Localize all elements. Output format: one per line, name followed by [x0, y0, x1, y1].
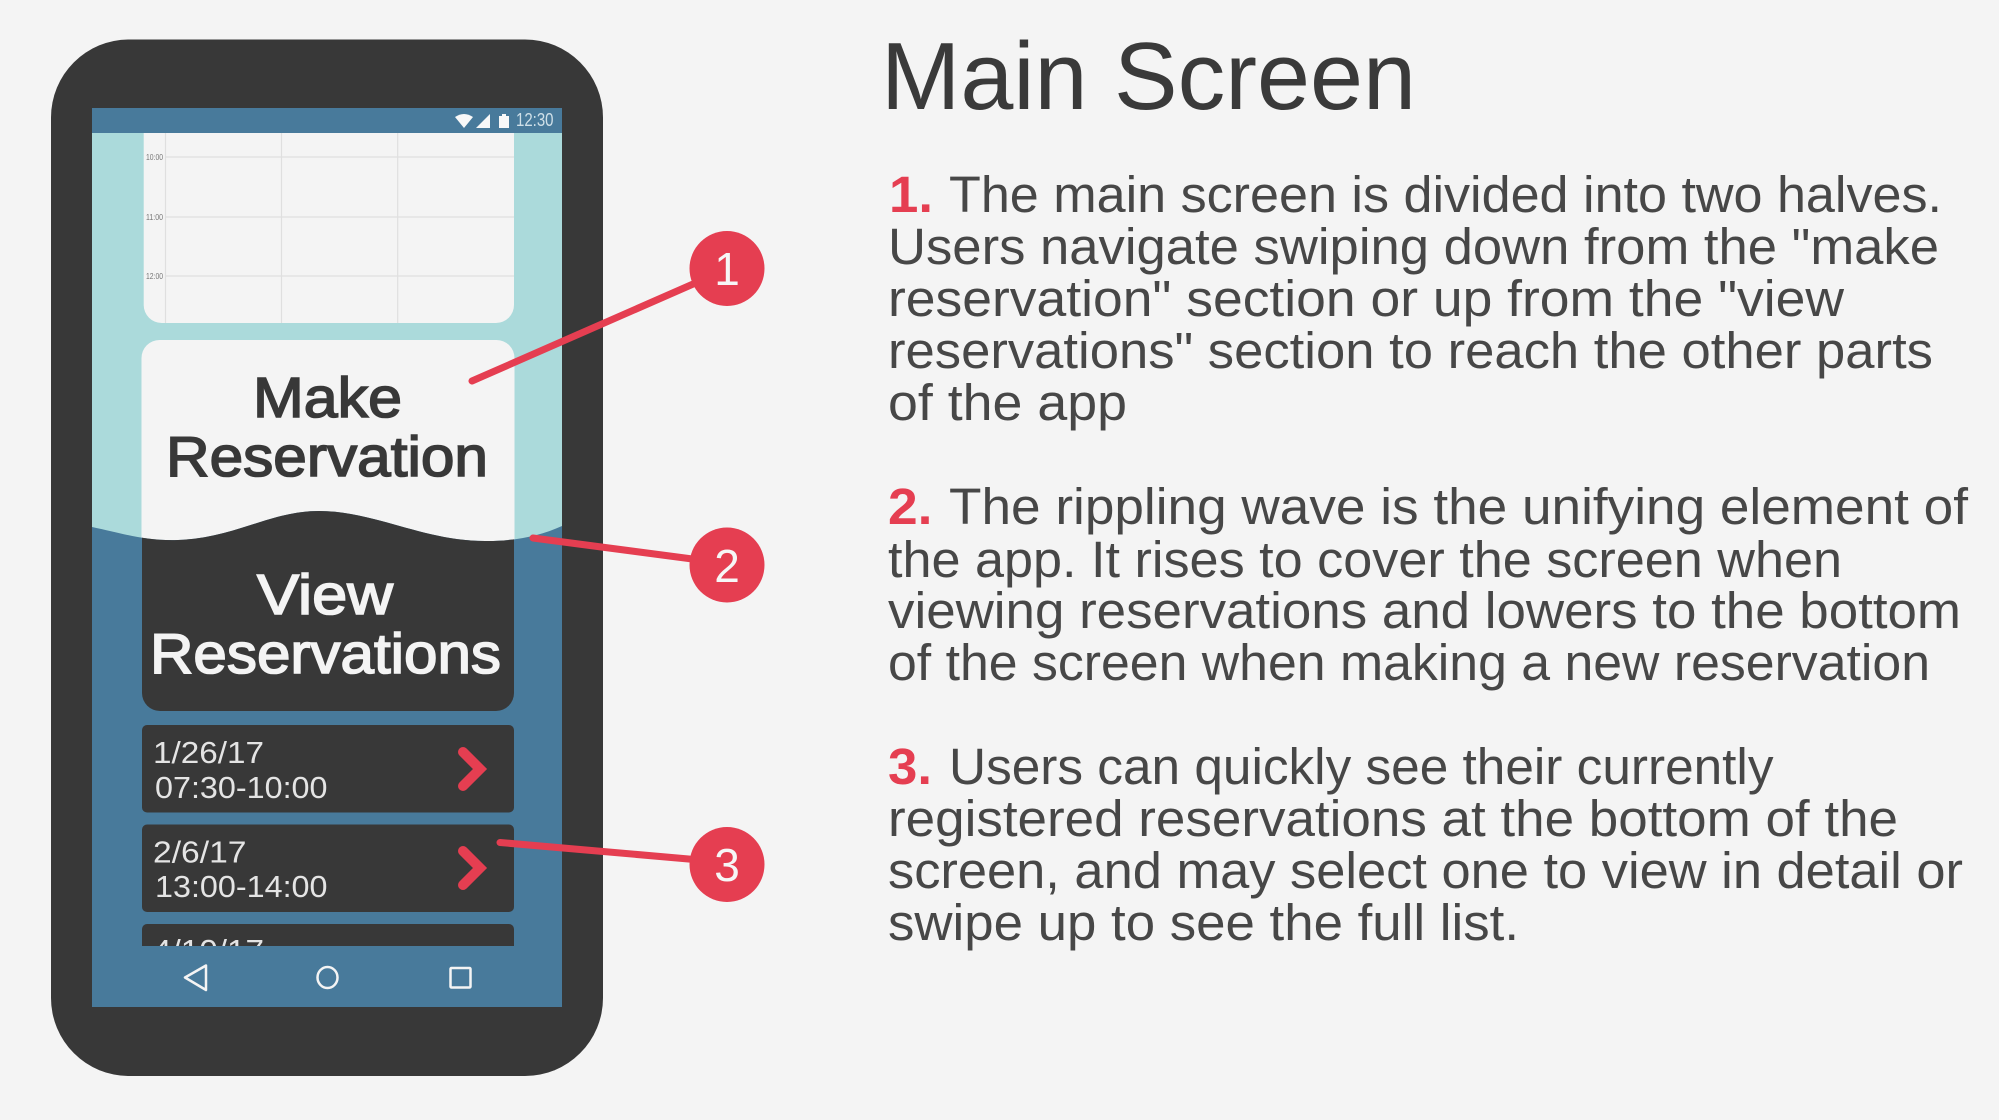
callout 1	[472, 231, 764, 381]
navigation bar	[92, 946, 562, 1007]
phone screen background	[92, 108, 562, 1007]
reservation row 1	[142, 725, 514, 812]
callout 3	[500, 827, 764, 902]
reservation row 1: 1/26/17	[153, 735, 264, 770]
paragraph 1: reservation" section or up from the "view	[888, 270, 1844, 327]
paragraph 2: the app. It rises to cover the screen when	[888, 531, 1842, 588]
paragraph 1: reservations" section to reach the other parts	[888, 322, 1933, 379]
paragraph 1: The main screen is divided into two halves.	[949, 166, 1942, 223]
calendar card: 12:00	[146, 272, 163, 281]
paragraph 2: of the screen when making a new reservation	[888, 634, 1930, 691]
view reservations card: View	[257, 563, 394, 627]
reservation row 2: 2/6/17	[153, 834, 246, 870]
calendar card: 11:00	[146, 213, 163, 222]
paragraph 3: Users can quickly see their currently	[949, 738, 1774, 795]
title: Main Screen	[881, 23, 1416, 130]
reservation row 3	[142, 924, 514, 984]
paragraph 3: screen, and may select one to view in detail or	[888, 842, 1963, 899]
reservation row 1: 07:30-10:00	[155, 770, 328, 805]
wave	[92, 511, 562, 1007]
callout 1: 1	[714, 243, 740, 295]
paragraph 2	[888, 478, 1969, 691]
phone mockup	[51, 40, 603, 1076]
phone body	[51, 40, 603, 1076]
paragraph 1: of the app	[888, 374, 1127, 431]
view reservations card: Reservations	[150, 622, 501, 686]
view reservations card	[142, 500, 514, 711]
reservation row 2	[142, 824, 514, 912]
paragraph 1	[888, 166, 1942, 431]
paragraph 2: viewing reservations and lowers to the bottom	[888, 582, 1961, 639]
calendar card: 10:00	[146, 153, 163, 162]
paragraph 2: 2.	[888, 478, 932, 535]
paragraph 1: Users navigate swiping down from the "make	[888, 218, 1939, 275]
paragraph 2: The rippling wave is the unifying element of	[949, 478, 1969, 535]
callout 3: 3	[714, 839, 740, 891]
make reservation card: Reservation	[166, 425, 488, 489]
status bar: 12:30	[516, 110, 554, 130]
make reservation card: Make	[253, 366, 402, 430]
paragraph 3	[888, 738, 1963, 951]
reservation row 2: 13:00-14:00	[155, 869, 328, 904]
paragraph 3: swipe up to see the full list.	[888, 894, 1519, 951]
paragraph 1: 1.	[889, 166, 933, 223]
calendar card	[144, 133, 514, 323]
make reservation card	[142, 340, 514, 560]
callout 2	[533, 528, 764, 602]
callout 2: 2	[714, 540, 740, 592]
status bar	[92, 108, 562, 133]
reservation row 3: 4/10/17	[153, 933, 264, 968]
paragraph 3: 3.	[888, 738, 932, 795]
paragraph 3: registered reservations at the bottom of the	[888, 790, 1898, 847]
